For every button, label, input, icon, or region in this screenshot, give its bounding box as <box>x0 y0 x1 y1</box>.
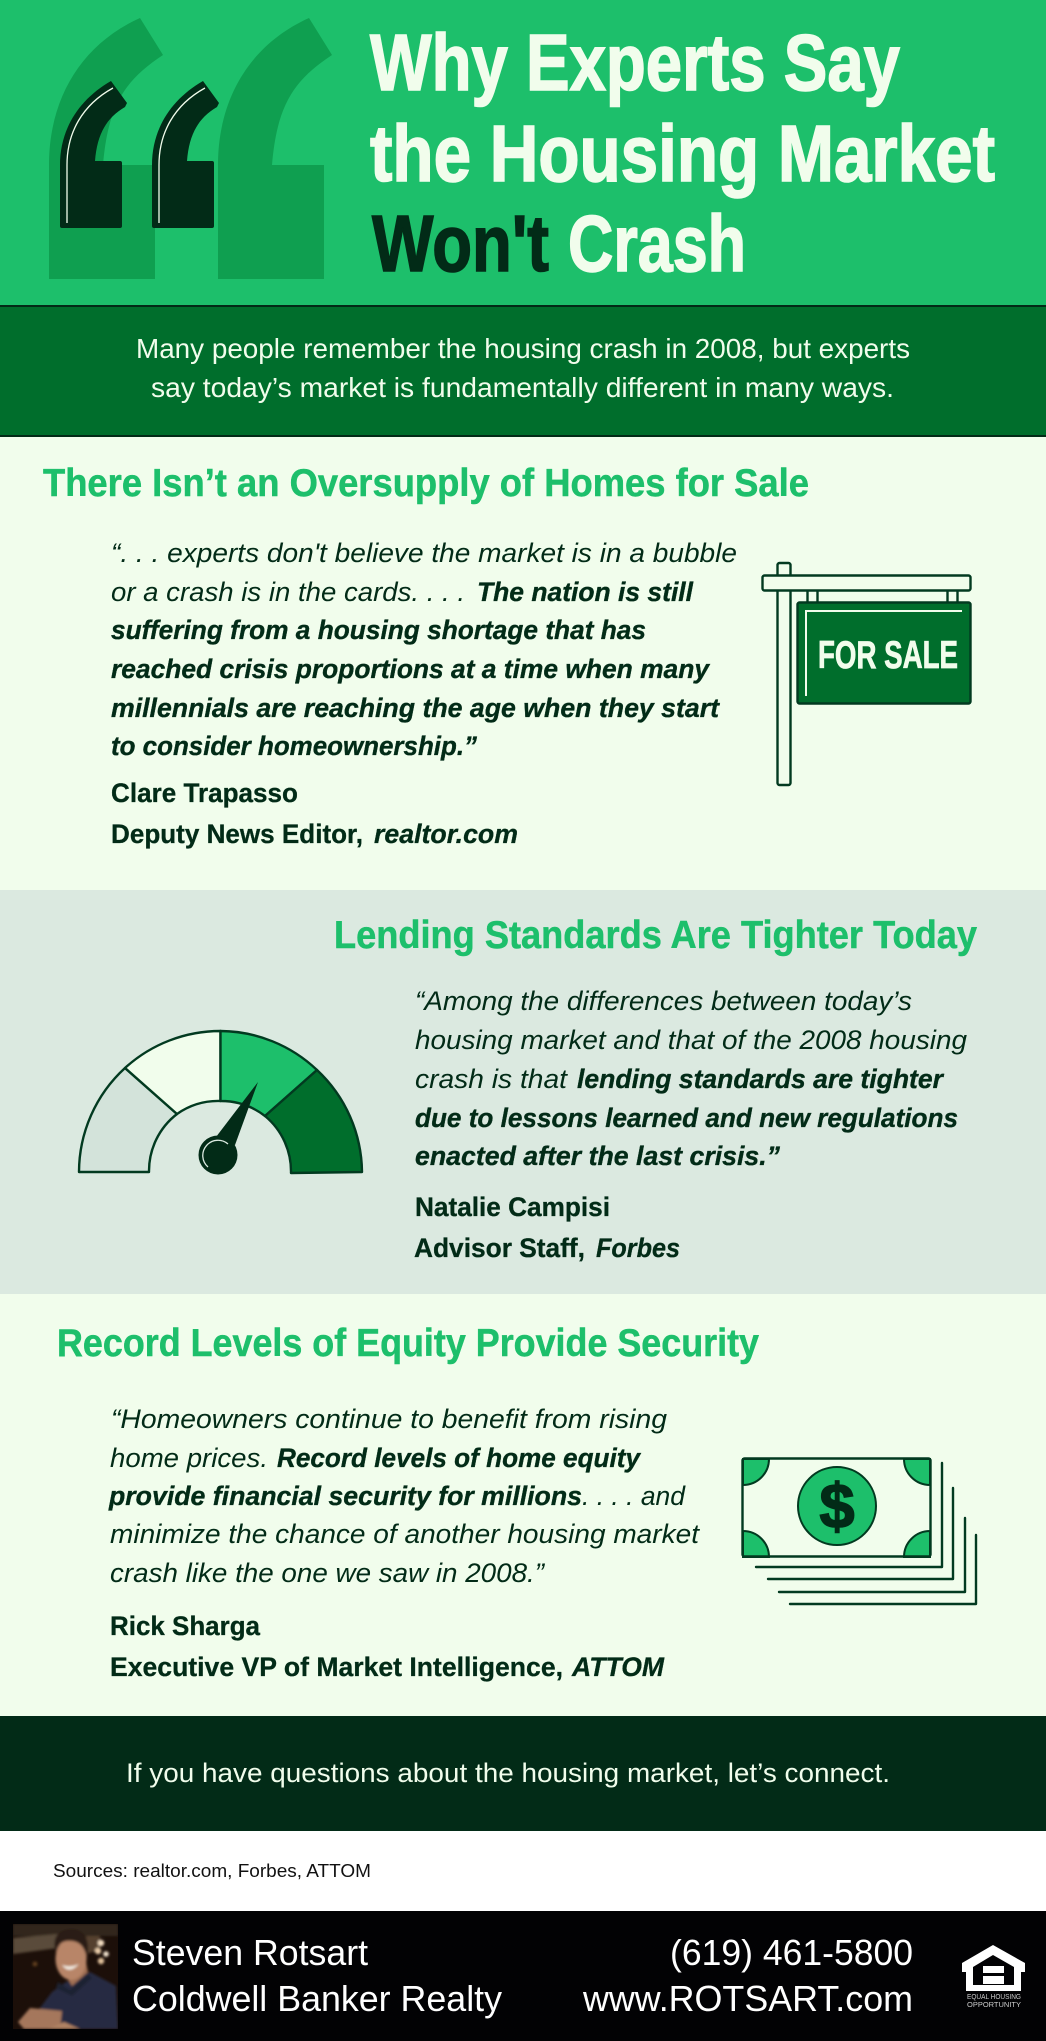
quote text: “Among the differences between today’s <box>415 986 912 1016</box>
quote text: Record levels of home equity <box>277 1443 642 1473</box>
quote text: minimize the chance of another housing market <box>110 1519 701 1549</box>
intro text: say today’s market is fundamentally different in many ways. <box>151 372 894 403</box>
attribution: Clare Trapasso <box>111 778 298 808</box>
intro text: Many people remember the housing crash in 2008, but experts <box>136 333 910 364</box>
attribution: realtor.com <box>374 819 518 849</box>
quote text: provide financial security for millions <box>108 1481 582 1511</box>
icon: for sale sign <box>762 563 970 785</box>
contact details <box>582 1932 913 2019</box>
quote text: home prices. <box>110 1443 268 1473</box>
attribution: Natalie Campisi <box>415 1192 610 1222</box>
intro band <box>0 305 1046 437</box>
quote text: housing market and that of the 2008 housing <box>415 1025 967 1055</box>
panel: lending standards <box>0 890 1046 1294</box>
heading: Record Levels of Equity Provide Security <box>57 1322 759 1365</box>
quote text: to consider homeownership.” <box>111 731 477 761</box>
panel: record equity <box>0 1294 1046 1716</box>
contact details: www.ROTSART.com <box>582 1978 913 2019</box>
icon: equal housing opportunity: OPPORTUNITY <box>967 2002 1021 2009</box>
quote text <box>111 538 737 761</box>
sources strip <box>0 1831 1046 1911</box>
icon: for sale sign: FOR SALE <box>818 634 958 677</box>
quote text: The nation is still <box>477 577 693 607</box>
agent name: Coldwell Banker Realty <box>132 1978 502 2019</box>
sources text: Sources: realtor.com, Forbes, ATTOM <box>53 1861 371 1881</box>
quote text: enacted after the last crisis.” <box>415 1141 780 1171</box>
quote text <box>108 1404 701 1588</box>
attribution <box>111 778 518 849</box>
quote text <box>415 986 967 1171</box>
quote text: crash like the one we saw in 2008.” <box>110 1558 545 1588</box>
quote text: reached crisis proportions at a time when many <box>111 654 711 684</box>
agent name: Steven Rotsart <box>132 1932 368 1973</box>
quote text: crash is that <box>415 1064 569 1094</box>
icon: equal housing opportunity <box>962 1945 1025 2009</box>
icon: stack of money: $ <box>819 1472 855 1542</box>
quote text: “. . . experts don't believe the market is in a bubble <box>111 538 737 568</box>
call to action band <box>0 1716 1046 1831</box>
call to action text: If you have questions about the housing market, let’s connect. <box>126 1758 890 1788</box>
title: Why Experts Say <box>370 18 900 107</box>
attribution: Executive VP of Market Intelligence, <box>110 1652 563 1682</box>
agent photo <box>13 1924 118 2029</box>
panel: oversupply of homes <box>0 437 1046 890</box>
icon: equal housing opportunity: EQUAL HOUSING <box>967 1994 1021 2001</box>
icon: dark quotation marks <box>60 81 219 228</box>
quote text: . . . . and <box>582 1481 686 1511</box>
attribution: Advisor Staff, <box>414 1233 585 1263</box>
attribution: Forbes <box>596 1233 680 1263</box>
title: Crash <box>568 199 746 288</box>
contact details: (619) 461-5800 <box>670 1932 913 1973</box>
quote text: “Homeowners continue to benefit from rising <box>111 1404 667 1434</box>
agent name <box>132 1932 502 2019</box>
attribution: Deputy News Editor, <box>111 819 363 849</box>
quote text: millennials are reaching the age when they start <box>111 693 720 723</box>
attribution: ATTOM <box>571 1652 665 1682</box>
quote text: suffering from a housing shortage that has <box>111 615 646 645</box>
attribution <box>414 1192 680 1263</box>
icon: stack of money <box>742 1458 976 1604</box>
attribution: Rick Sharga <box>110 1611 260 1641</box>
heading: There Isn’t an Oversupply of Homes for Sale <box>43 462 809 505</box>
icon: large background quotation marks <box>49 18 332 279</box>
title <box>370 18 995 288</box>
header banner <box>0 0 1046 306</box>
quote text: or a crash is in the cards. . . . <box>111 577 465 607</box>
footer bar <box>0 1911 1046 2041</box>
attribution <box>110 1611 665 1682</box>
heading: Lending Standards Are Tighter Today <box>334 914 977 957</box>
quote text: due to lessons learned and new regulations <box>415 1103 958 1133</box>
quote text: lending standards are tighter <box>577 1064 944 1094</box>
title: Won't <box>372 199 549 288</box>
icon: gauge <box>79 1031 362 1174</box>
intro text <box>136 333 910 403</box>
